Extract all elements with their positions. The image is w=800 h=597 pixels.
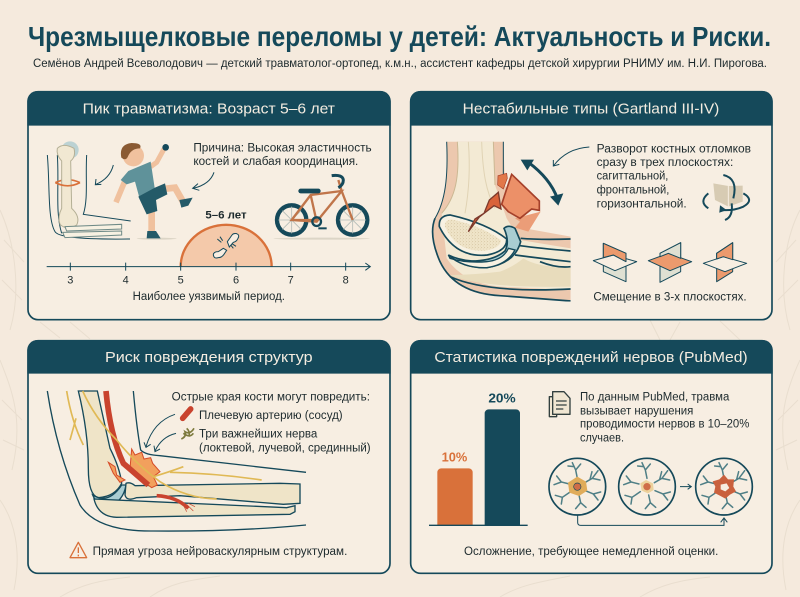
- icon: affected neuron: [619, 458, 675, 515]
- text: three planes: Разворот костных отломков: [597, 142, 751, 156]
- chart: age axis: 3: [67, 274, 73, 286]
- chart: age axis: 7: [288, 274, 294, 286]
- chart: age axis: 5: [178, 274, 184, 286]
- text: cause: Причина: Высокая эластичность: [193, 141, 372, 155]
- text: PubMed: [580, 390, 749, 445]
- icon: document: [549, 392, 570, 417]
- bar chart: 10%: [442, 451, 467, 465]
- text: three planes: фронтальной,: [597, 182, 669, 196]
- icon: artery: [183, 409, 191, 418]
- text: sharp edges: Острые края кости могут повредить:: [172, 390, 370, 404]
- heading: Пик травматизма: Возраст 5–6 лет: [83, 102, 335, 118]
- chart: age axis: 8: [343, 274, 349, 286]
- text: three planes: [597, 142, 751, 210]
- text: cause: [193, 141, 372, 168]
- text: cause: костей и слабая координация.: [193, 154, 358, 168]
- text: three planes: сразу в трех плоскостях:: [597, 155, 733, 169]
- panel: nerve stats: [410, 340, 773, 573]
- icon: falling child: [116, 143, 193, 240]
- text: PubMed: случаев.: [580, 431, 624, 445]
- chart: age axis: 4: [123, 274, 129, 286]
- bar chart: [429, 392, 528, 525]
- heading: Риск повреждения структур: [105, 350, 313, 366]
- text: nerves: Три важнейших нерва: [199, 427, 317, 441]
- text: nerves: (локтевой, лучевой, срединный): [199, 441, 371, 455]
- icon: plane 2: [648, 243, 692, 282]
- illustration: elbow fracture: [433, 142, 571, 301]
- text: three planes: сагиттальной,: [597, 168, 668, 182]
- caption: Осложнение, требующее немедленной оценки.: [464, 544, 718, 558]
- panel: peak age: [27, 91, 391, 320]
- icon: nerve bundle: [181, 428, 194, 439]
- icon: rotating fragment: [703, 175, 749, 220]
- text: artery: Плечевую артерию (сосуд): [199, 408, 343, 422]
- bar chart: 20%: [488, 392, 516, 406]
- chart: vulnerable arc: [181, 225, 272, 267]
- arrow: [95, 165, 113, 185]
- icon: arm bone: [47, 141, 131, 239]
- text: PubMed: вызывает нарушения: [580, 403, 693, 417]
- icon: plane 1: [593, 243, 637, 282]
- text: three planes: горизонтальной.: [597, 196, 687, 210]
- illustration: arm with vessels and nerves: [47, 391, 306, 531]
- heading: Нестабильные типы (Gartland III-IV): [463, 102, 719, 118]
- subtitle: author: Семёнов Андрей Всеволодович — детский травматолог-ортопед, к.м.н., ассистент кафедры детской хирургии РНИМУ им. Н.И. Пирогова.: [33, 58, 767, 70]
- caption: Наиболее уязвимый период.: [133, 289, 285, 303]
- arrow: [193, 172, 214, 190]
- panel: structure damage risk: [27, 340, 391, 573]
- arrow: [680, 484, 691, 489]
- chart: age axis: 6: [233, 274, 239, 286]
- arrow: rotation: [521, 160, 563, 206]
- icon: plane 3: [703, 243, 747, 282]
- heading: Статистика повреждений нервов (PubMed): [434, 350, 748, 366]
- arrows: [144, 414, 176, 452]
- chart: age axis: [47, 263, 370, 286]
- icon: healthy neuron: [549, 458, 606, 515]
- caption: Смещение в 3-х плоскостях.: [593, 290, 747, 304]
- icon: broken bone: [213, 233, 239, 258]
- icon: warning: [70, 542, 87, 558]
- text: PubMed: проводимости нервов в 10–20%: [580, 417, 749, 431]
- panel: unstable types: [410, 91, 773, 320]
- icon: damaged neuron: [696, 458, 752, 515]
- icon: bicycle: [273, 175, 370, 240]
- arrow: [553, 147, 589, 166]
- arrow: connector: [578, 515, 727, 525]
- text: nerves: [199, 427, 371, 455]
- text: threat: Прямая угроза нейроваскулярным структурам.: [93, 544, 347, 558]
- text: PubMed: По данным PubMed, травма: [580, 390, 729, 404]
- label: 5–6 years: 5–6 лет: [205, 209, 247, 221]
